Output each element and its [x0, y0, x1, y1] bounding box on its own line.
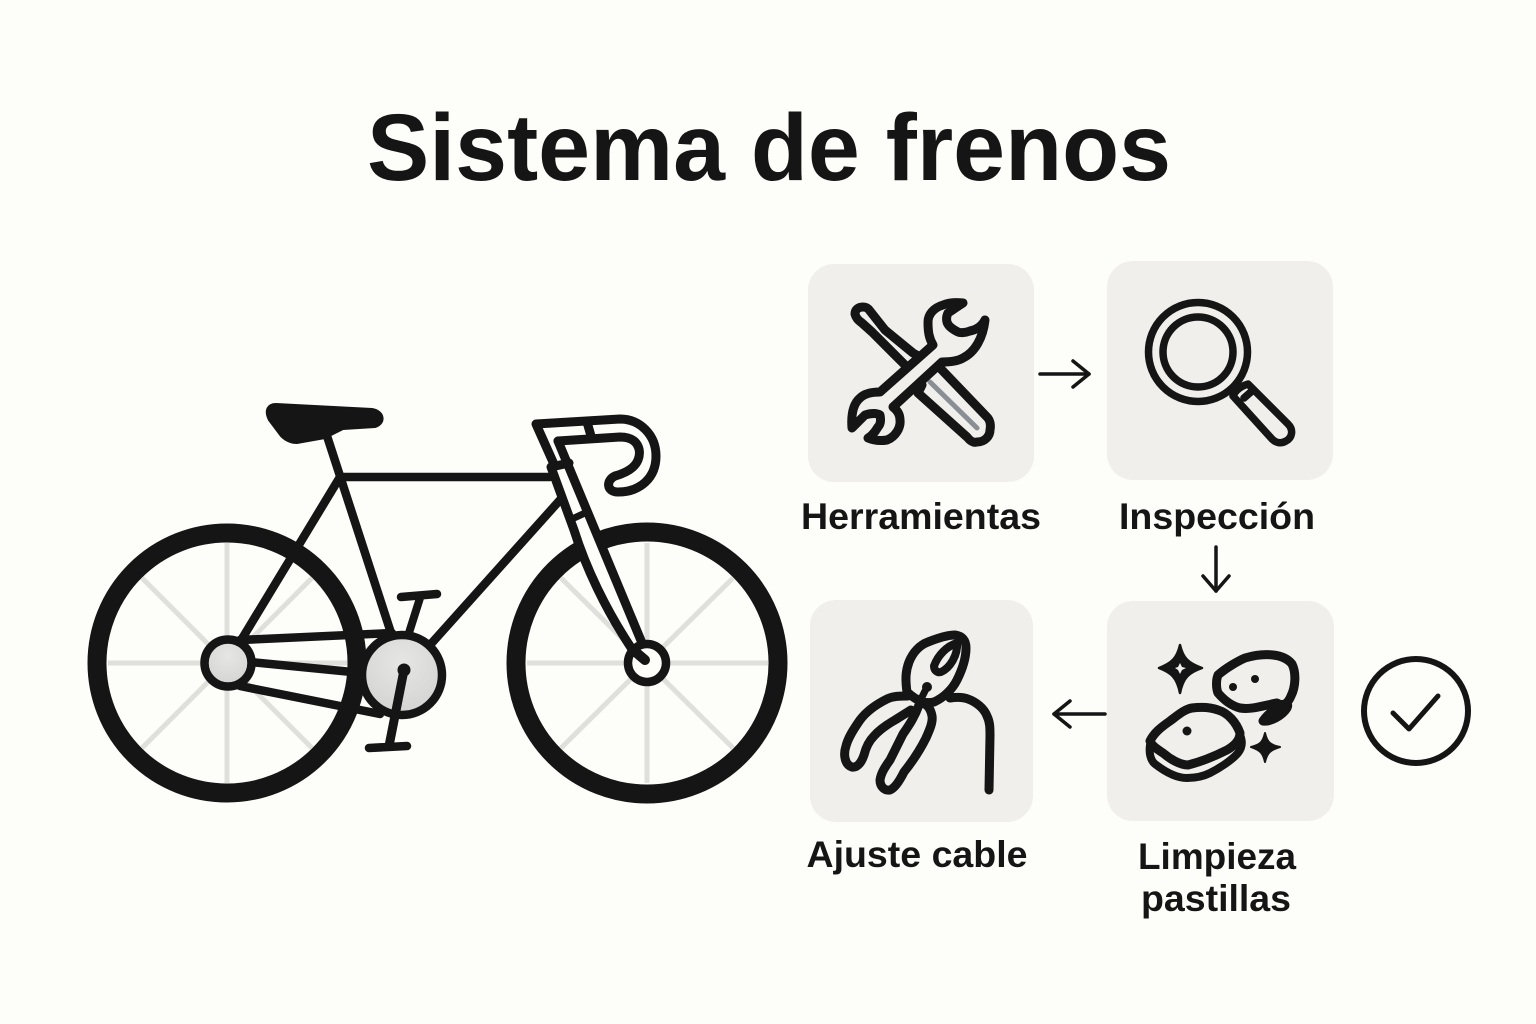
frame [240, 436, 560, 714]
arrow: down [1203, 547, 1229, 591]
step: Ajuste cable [810, 600, 1033, 822]
title: Sistema de frenos [367, 95, 1171, 201]
chainring and pedals [362, 594, 442, 748]
bicycle illustration [97, 404, 778, 794]
icon: check circle [1364, 659, 1468, 763]
panel: limpieza [1107, 601, 1334, 821]
icon: brake pads and sparkles [1150, 645, 1295, 778]
front wheel [516, 532, 778, 794]
icon: crossed tools [852, 303, 990, 442]
step: Herramientas [808, 264, 1034, 482]
label: Ajuste cable: Ajuste cable [806, 834, 1028, 875]
label: Limpieza pastillas: pastillas [1141, 878, 1291, 919]
arrow: right [1040, 361, 1089, 387]
handlebar and fork [536, 419, 656, 655]
step: Inspección [1107, 261, 1333, 480]
label: Inspección: Inspección [1119, 496, 1315, 537]
label: Herramientas: Herramientas [801, 496, 1041, 537]
rear hub [204, 640, 252, 686]
arrow: left [1054, 701, 1105, 727]
icon: magnifying glass [1148, 302, 1292, 443]
step: Limpieza pastillas [1107, 601, 1334, 821]
rear wheel [97, 533, 357, 793]
label: Limpieza pastillas: Limpieza [1138, 836, 1296, 877]
panel: inspeccion [1107, 261, 1333, 480]
front hub [628, 644, 666, 682]
panel: ajuste [810, 600, 1033, 822]
saddle [267, 404, 383, 443]
icon: pliers and cable [845, 635, 990, 790]
label: Limpieza pastillas [1138, 836, 1296, 919]
panel: herramientas [808, 264, 1034, 482]
